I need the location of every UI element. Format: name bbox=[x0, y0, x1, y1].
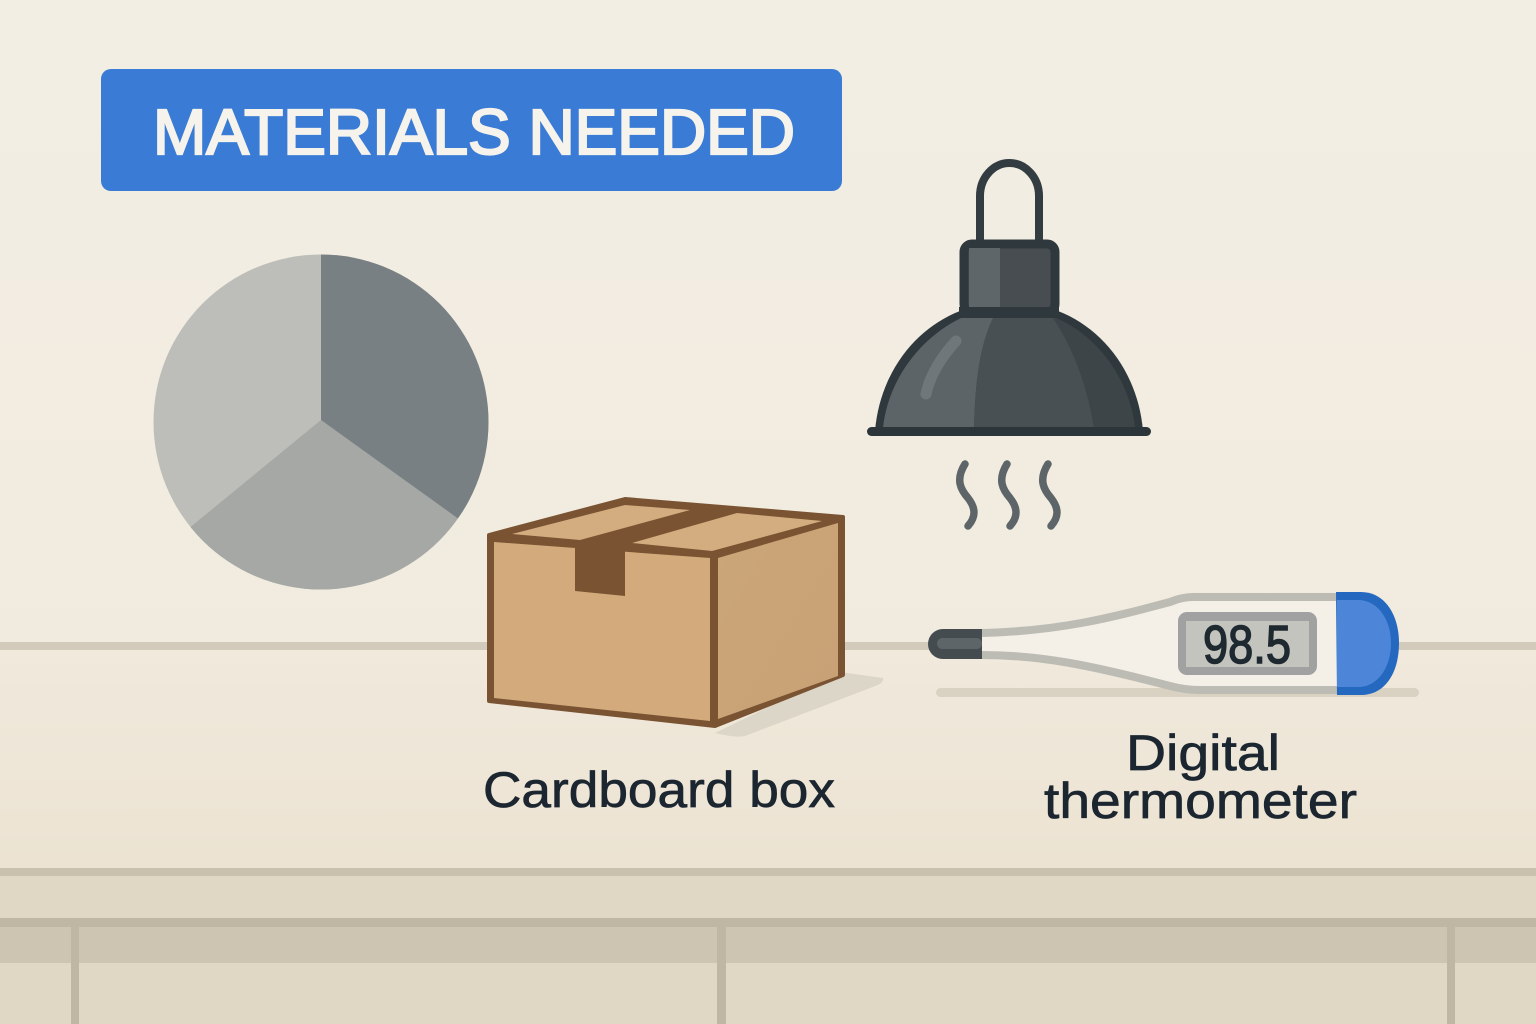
icon: cardboard box bbox=[489, 499, 883, 737]
title text: MATERIALS NEEDED bbox=[153, 96, 795, 168]
icon: digital thermometer bbox=[928, 592, 1419, 697]
label: digital thermometer bbox=[1044, 725, 1357, 829]
icon: heat lamp bbox=[867, 163, 1151, 526]
label: digital thermometer: thermometer bbox=[1044, 773, 1357, 829]
label: cardboard box: Cardboard box bbox=[483, 762, 835, 818]
pie chart: grey three-part disc bbox=[150, 250, 495, 600]
icon: heat waves bbox=[960, 464, 1057, 526]
label: digital thermometer: Digital bbox=[1126, 725, 1280, 781]
title banner bbox=[101, 69, 842, 191]
background: wall bbox=[0, 0, 1536, 644]
background: counter top bbox=[0, 650, 1536, 868]
thermometer reading: 98.5 bbox=[1203, 615, 1291, 675]
